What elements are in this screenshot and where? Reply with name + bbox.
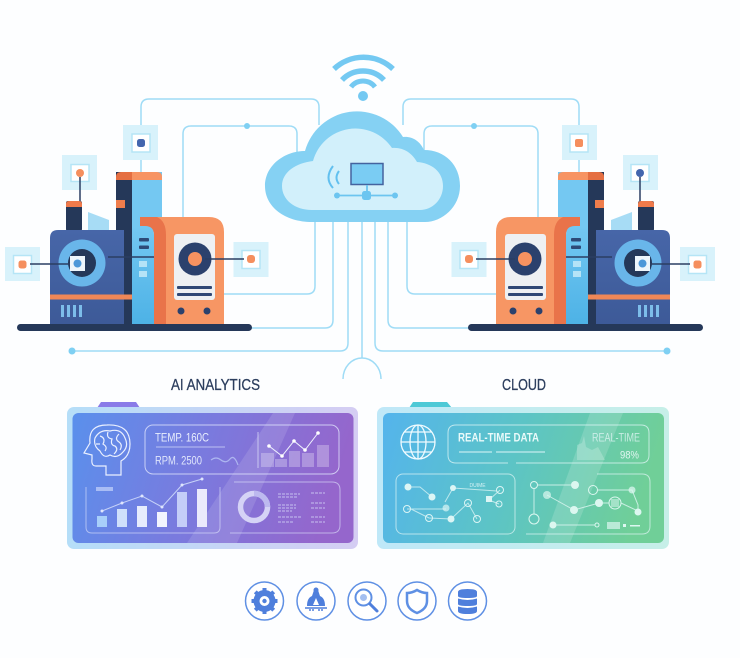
stats card: RPM. 2500 [155,454,202,468]
right machine group [452,125,715,331]
right chimney [611,201,654,231]
real-time data card: REAL-TIME DATA [458,430,539,444]
right sensor wires [476,177,690,264]
orange machine [140,217,224,324]
sensor nodes [5,125,268,281]
panel: AI analytics dashboard [67,402,358,549]
icon row [246,582,486,620]
tower [116,172,162,324]
icon: gear [246,582,284,620]
bar chart [86,478,220,533]
stats card [145,425,339,474]
real-time data card [448,425,649,463]
icon: wifi signal [334,57,393,101]
right orange machine [496,217,580,324]
icon: robot bell [297,582,335,620]
right base bar [468,324,703,331]
real-time data card: REAL-TIME [592,430,640,444]
connector lines [68,99,670,379]
right main blue body [588,230,670,324]
heading: AI Analytics: AI ANALYTICS [171,377,260,394]
icon: monitor network [328,164,398,200]
base bar [17,324,252,331]
network diagram left [396,474,515,534]
icon: brain head [84,425,130,475]
sensor wires [30,177,244,264]
main blue body [50,230,132,324]
blue panel [132,226,154,324]
right sensor nodes [452,125,715,281]
network diagram left: DUIME [470,483,486,489]
icon: database [448,582,486,620]
right tower [558,172,604,324]
donut chart card [230,482,340,533]
network diagram right [526,474,650,534]
icon: globe [401,425,435,459]
right blue panel [566,226,588,324]
icon: shield [398,582,436,620]
left machine group [5,125,268,331]
panel: cloud dashboard [377,402,669,549]
cloud hub [265,111,460,222]
stats card: TEMP. 160C [155,430,209,444]
icon: magnifier [348,582,386,620]
real-time data card: 98% [620,450,639,462]
heading: Cloud: CLOUD [502,377,546,394]
chimney [66,201,109,231]
